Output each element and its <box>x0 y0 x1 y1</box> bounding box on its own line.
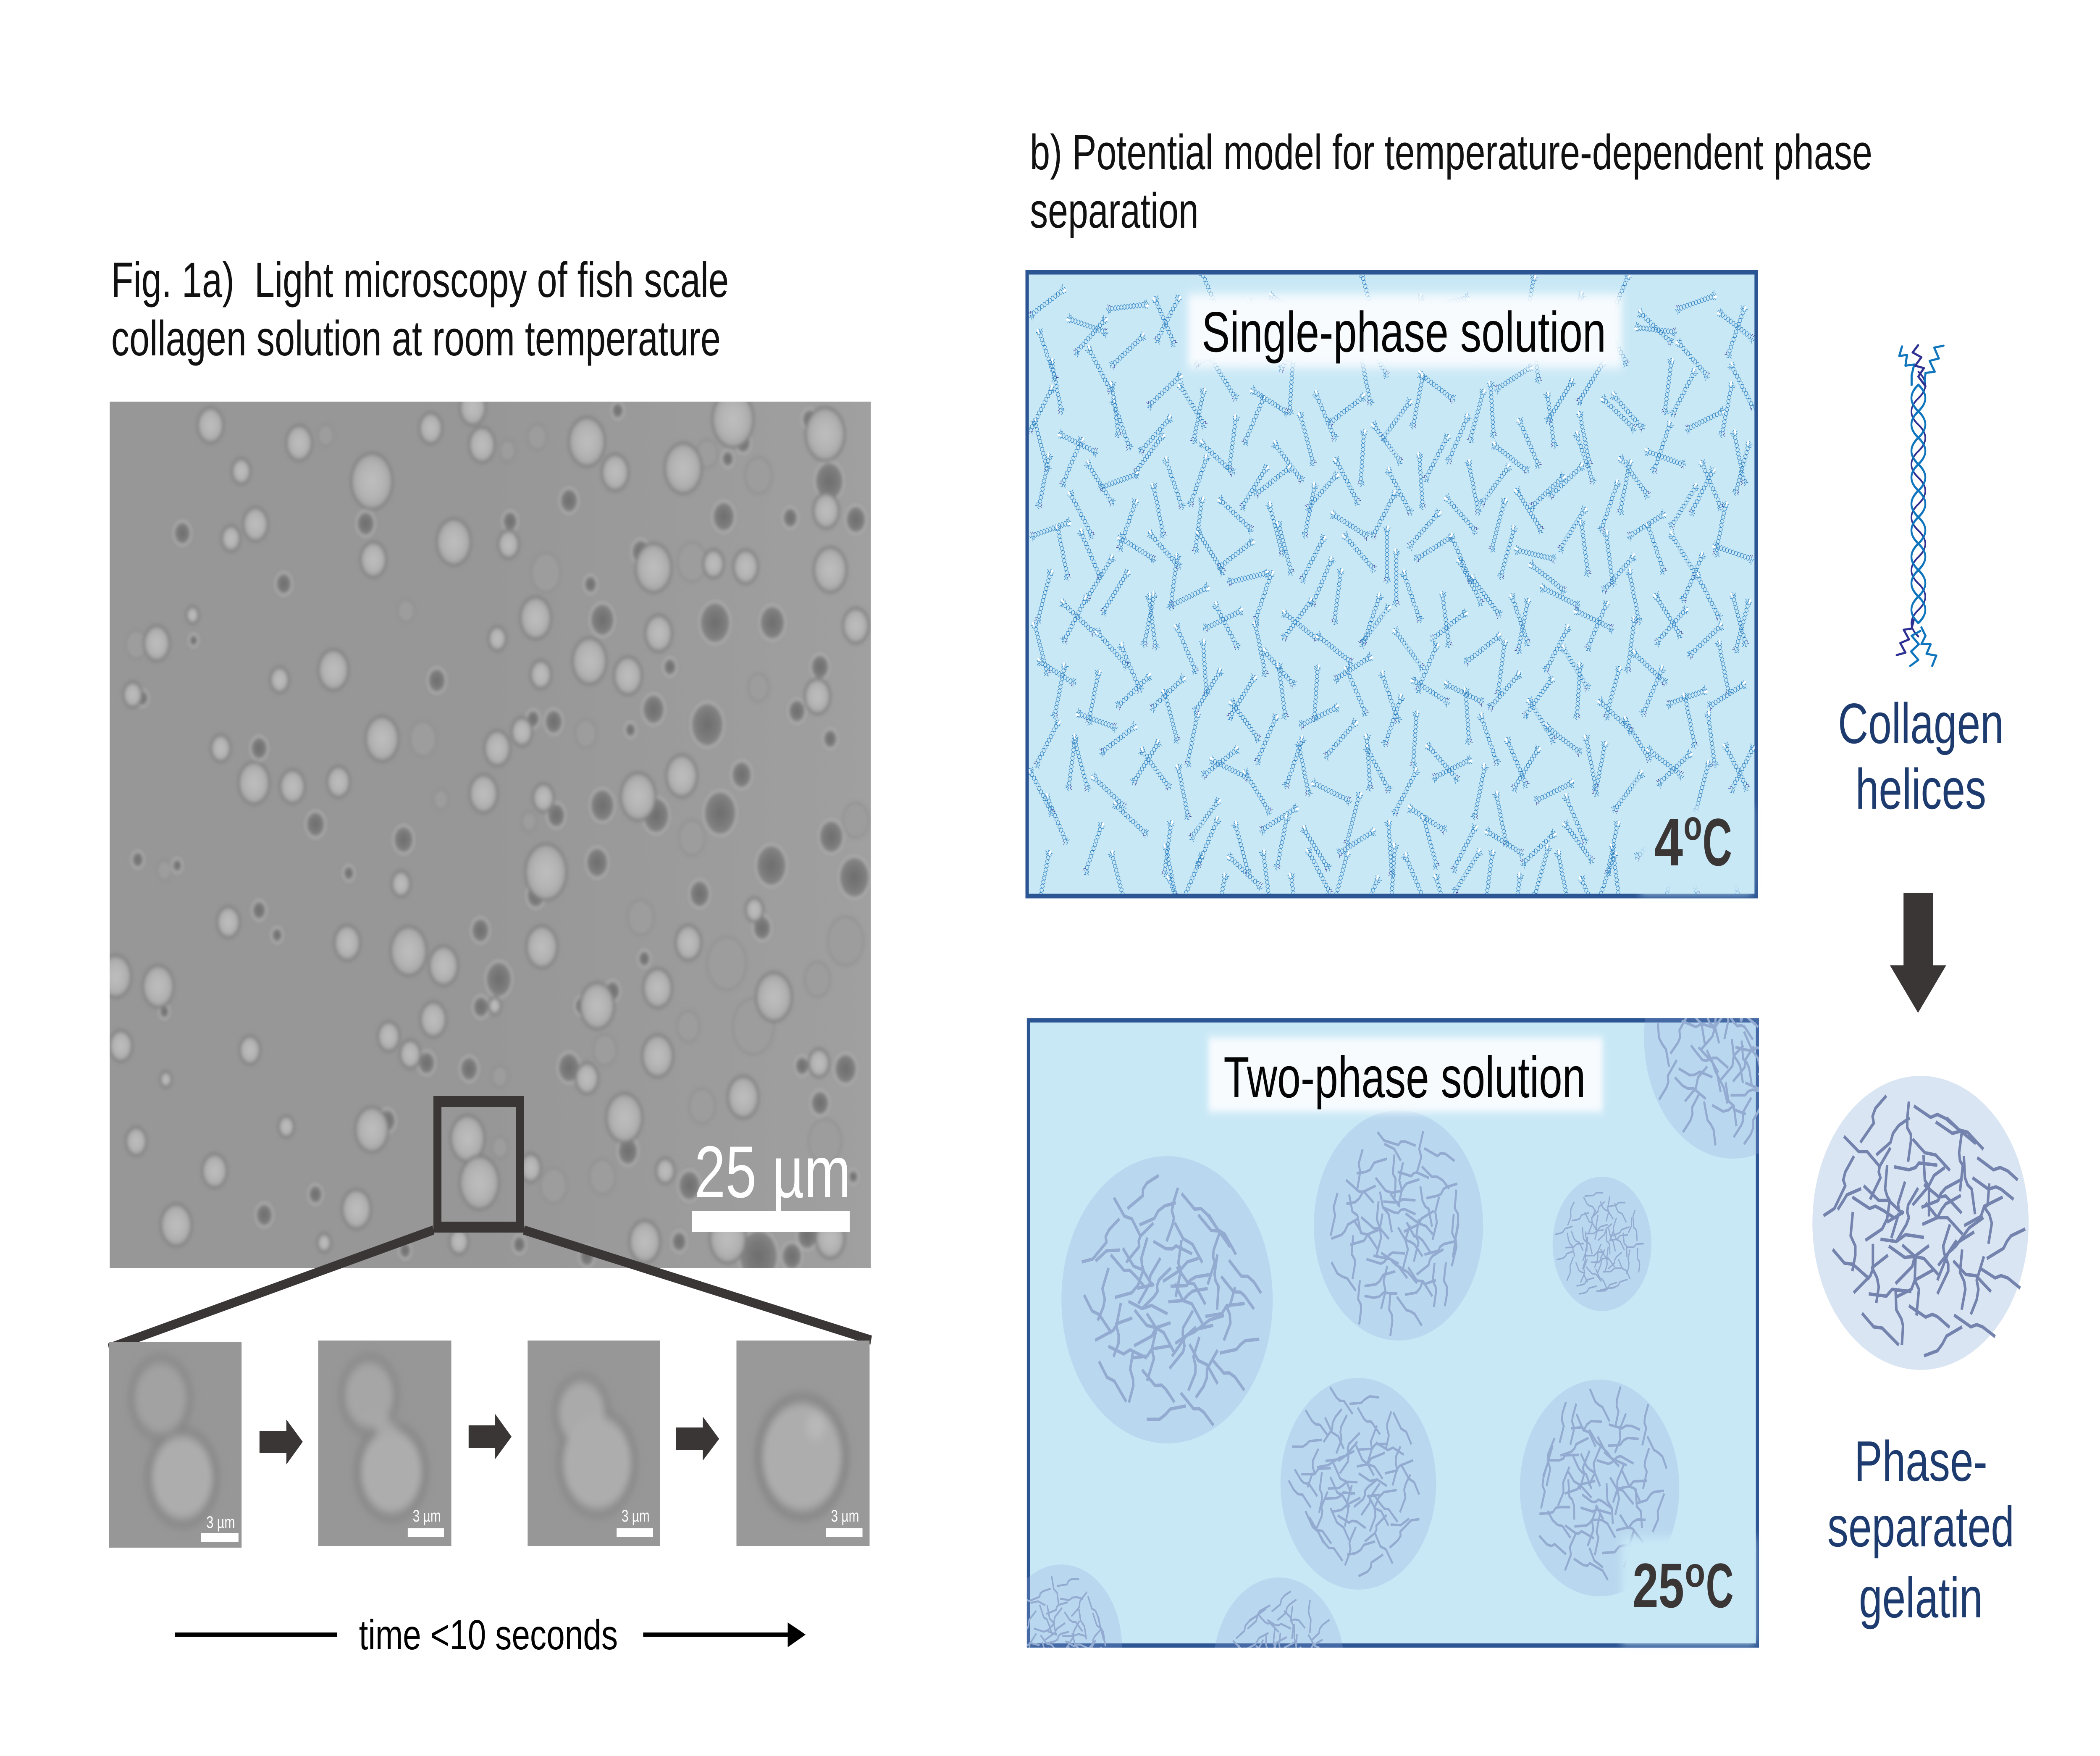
heading: panel b <box>1030 124 1872 238</box>
label: collagen helices: Collagen <box>1838 692 2004 756</box>
panel: light micrograph <box>100 390 871 1283</box>
label: single-phase solution: Single-phase solution <box>1202 300 1606 364</box>
heading: panel b: separation <box>1030 183 1199 238</box>
label: 4°C: C <box>1702 804 1732 880</box>
label: phase-separated gelatin <box>1827 1430 2014 1630</box>
label: 4°C: 4 <box>1654 804 1683 880</box>
icon: phase-separated gelatin droplet <box>1812 1076 2029 1370</box>
panel: time-lapse frame 4 <box>736 1341 869 1546</box>
panel: time-lapse frame 1: 3 µm <box>206 1513 235 1532</box>
label: 25°C <box>1622 1538 1755 1643</box>
arrow 1 <box>260 1420 303 1464</box>
arrow 2 <box>469 1414 512 1459</box>
label: 4°C <box>1641 802 1751 893</box>
label: 25°C: 25 <box>1633 1550 1684 1621</box>
label: 4°C: o <box>1684 802 1702 849</box>
label: collagen helices: helices <box>1856 757 1986 821</box>
label: 25°C: C <box>1706 1550 1734 1621</box>
collagen rods <box>1025 266 1758 931</box>
panel: single-phase solution <box>1025 266 1758 931</box>
label: collagen helices <box>1838 692 2004 821</box>
heading: figure 1a: Fig. 1a) Light microscopy of fish scale <box>111 252 729 308</box>
panel: time-lapse frame 3: 3 µm <box>622 1507 650 1525</box>
heading: figure 1a <box>111 252 729 366</box>
panel: time-lapse frame 2: 3 µm <box>413 1507 441 1525</box>
scale bar: 25 µm: 25 µm <box>694 1131 851 1213</box>
panel: time-lapse frame 4: 3 µm <box>831 1507 859 1525</box>
label: phase-separated gelatin: Phase- <box>1854 1430 1987 1493</box>
figure <box>108 134 2029 1650</box>
time axis <box>175 1611 806 1659</box>
label: 25°C: o <box>1685 1549 1705 1596</box>
panel: time-lapse frame 3 <box>528 1341 660 1546</box>
time axis: time <10 seconds <box>359 1611 618 1659</box>
arrow 3 <box>676 1417 719 1461</box>
label: two-phase solution: Two-phase solution <box>1223 1045 1586 1110</box>
panel: time-lapse frame 1 <box>109 1342 242 1548</box>
panel: time-lapse frame 2 <box>318 1341 452 1546</box>
heading: figure 1a: collagen solution at room temperature <box>111 310 721 366</box>
droplets of phase-separated gelatin <box>1026 1018 1759 1648</box>
heading: panel b: b) Potential model for temperature-dependent phase <box>1030 124 1872 180</box>
label: phase-separated gelatin: separated <box>1827 1495 2014 1559</box>
zoom frame and connector lines <box>109 1101 871 1348</box>
label: phase-separated gelatin: gelatin <box>1859 1566 1983 1630</box>
panel: two-phase solution <box>1026 1018 1759 1648</box>
arrow: down <box>1890 893 1946 1013</box>
icon: collagen helix <box>1897 345 1943 666</box>
